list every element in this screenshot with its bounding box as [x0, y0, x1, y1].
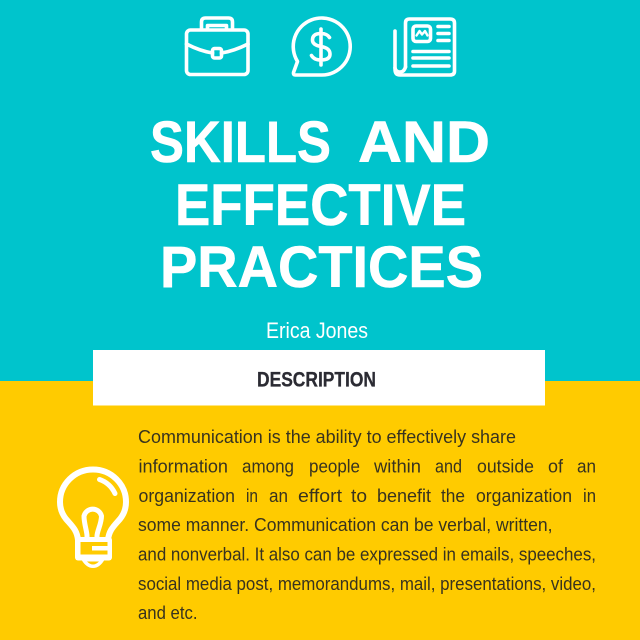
title: EFFECTIVE	[175, 173, 466, 238]
body text: information	[138, 456, 228, 476]
body text: Communication is the ability to effectively share	[138, 427, 516, 447]
icon: dollar speech bubble	[293, 18, 350, 75]
body text: an	[577, 456, 596, 476]
body text: outside	[477, 456, 534, 476]
body text: in	[246, 486, 258, 506]
title: AND	[358, 110, 490, 175]
body text: effort	[298, 486, 342, 506]
body text: among	[242, 456, 294, 476]
body text: of	[548, 456, 564, 476]
body text: and etc.	[138, 603, 198, 623]
icon: briefcase	[186, 18, 248, 74]
body text: people	[309, 456, 360, 476]
body text: and	[435, 456, 462, 476]
body text: benefit	[377, 486, 431, 506]
panel: yellow lower background	[0, 381, 640, 640]
icon: light bulb	[60, 470, 126, 568]
description banner	[93, 350, 545, 406]
body text: organization	[138, 486, 235, 506]
body text: within	[373, 456, 421, 476]
title: PRACTICES	[160, 235, 483, 300]
description banner: DESCRIPTION	[257, 368, 376, 392]
icon: newspaper	[395, 19, 454, 75]
title: SKILLS	[150, 110, 331, 175]
author name: Erica Jones	[266, 318, 368, 343]
body text: the	[441, 486, 465, 506]
body text: in	[583, 486, 596, 506]
body text: an	[269, 486, 288, 506]
body text: and nonverbal. It also can be expressed in emails, speeches,	[138, 544, 596, 564]
title	[150, 110, 490, 300]
body text: organization	[476, 486, 572, 506]
panel: teal header background	[0, 0, 640, 381]
body text: to	[351, 486, 367, 506]
body text	[138, 427, 596, 623]
body text: social media post, memorandums, mail, presentations, video,	[138, 574, 596, 594]
body text: some manner. Communication can be verbal, written,	[138, 515, 552, 535]
